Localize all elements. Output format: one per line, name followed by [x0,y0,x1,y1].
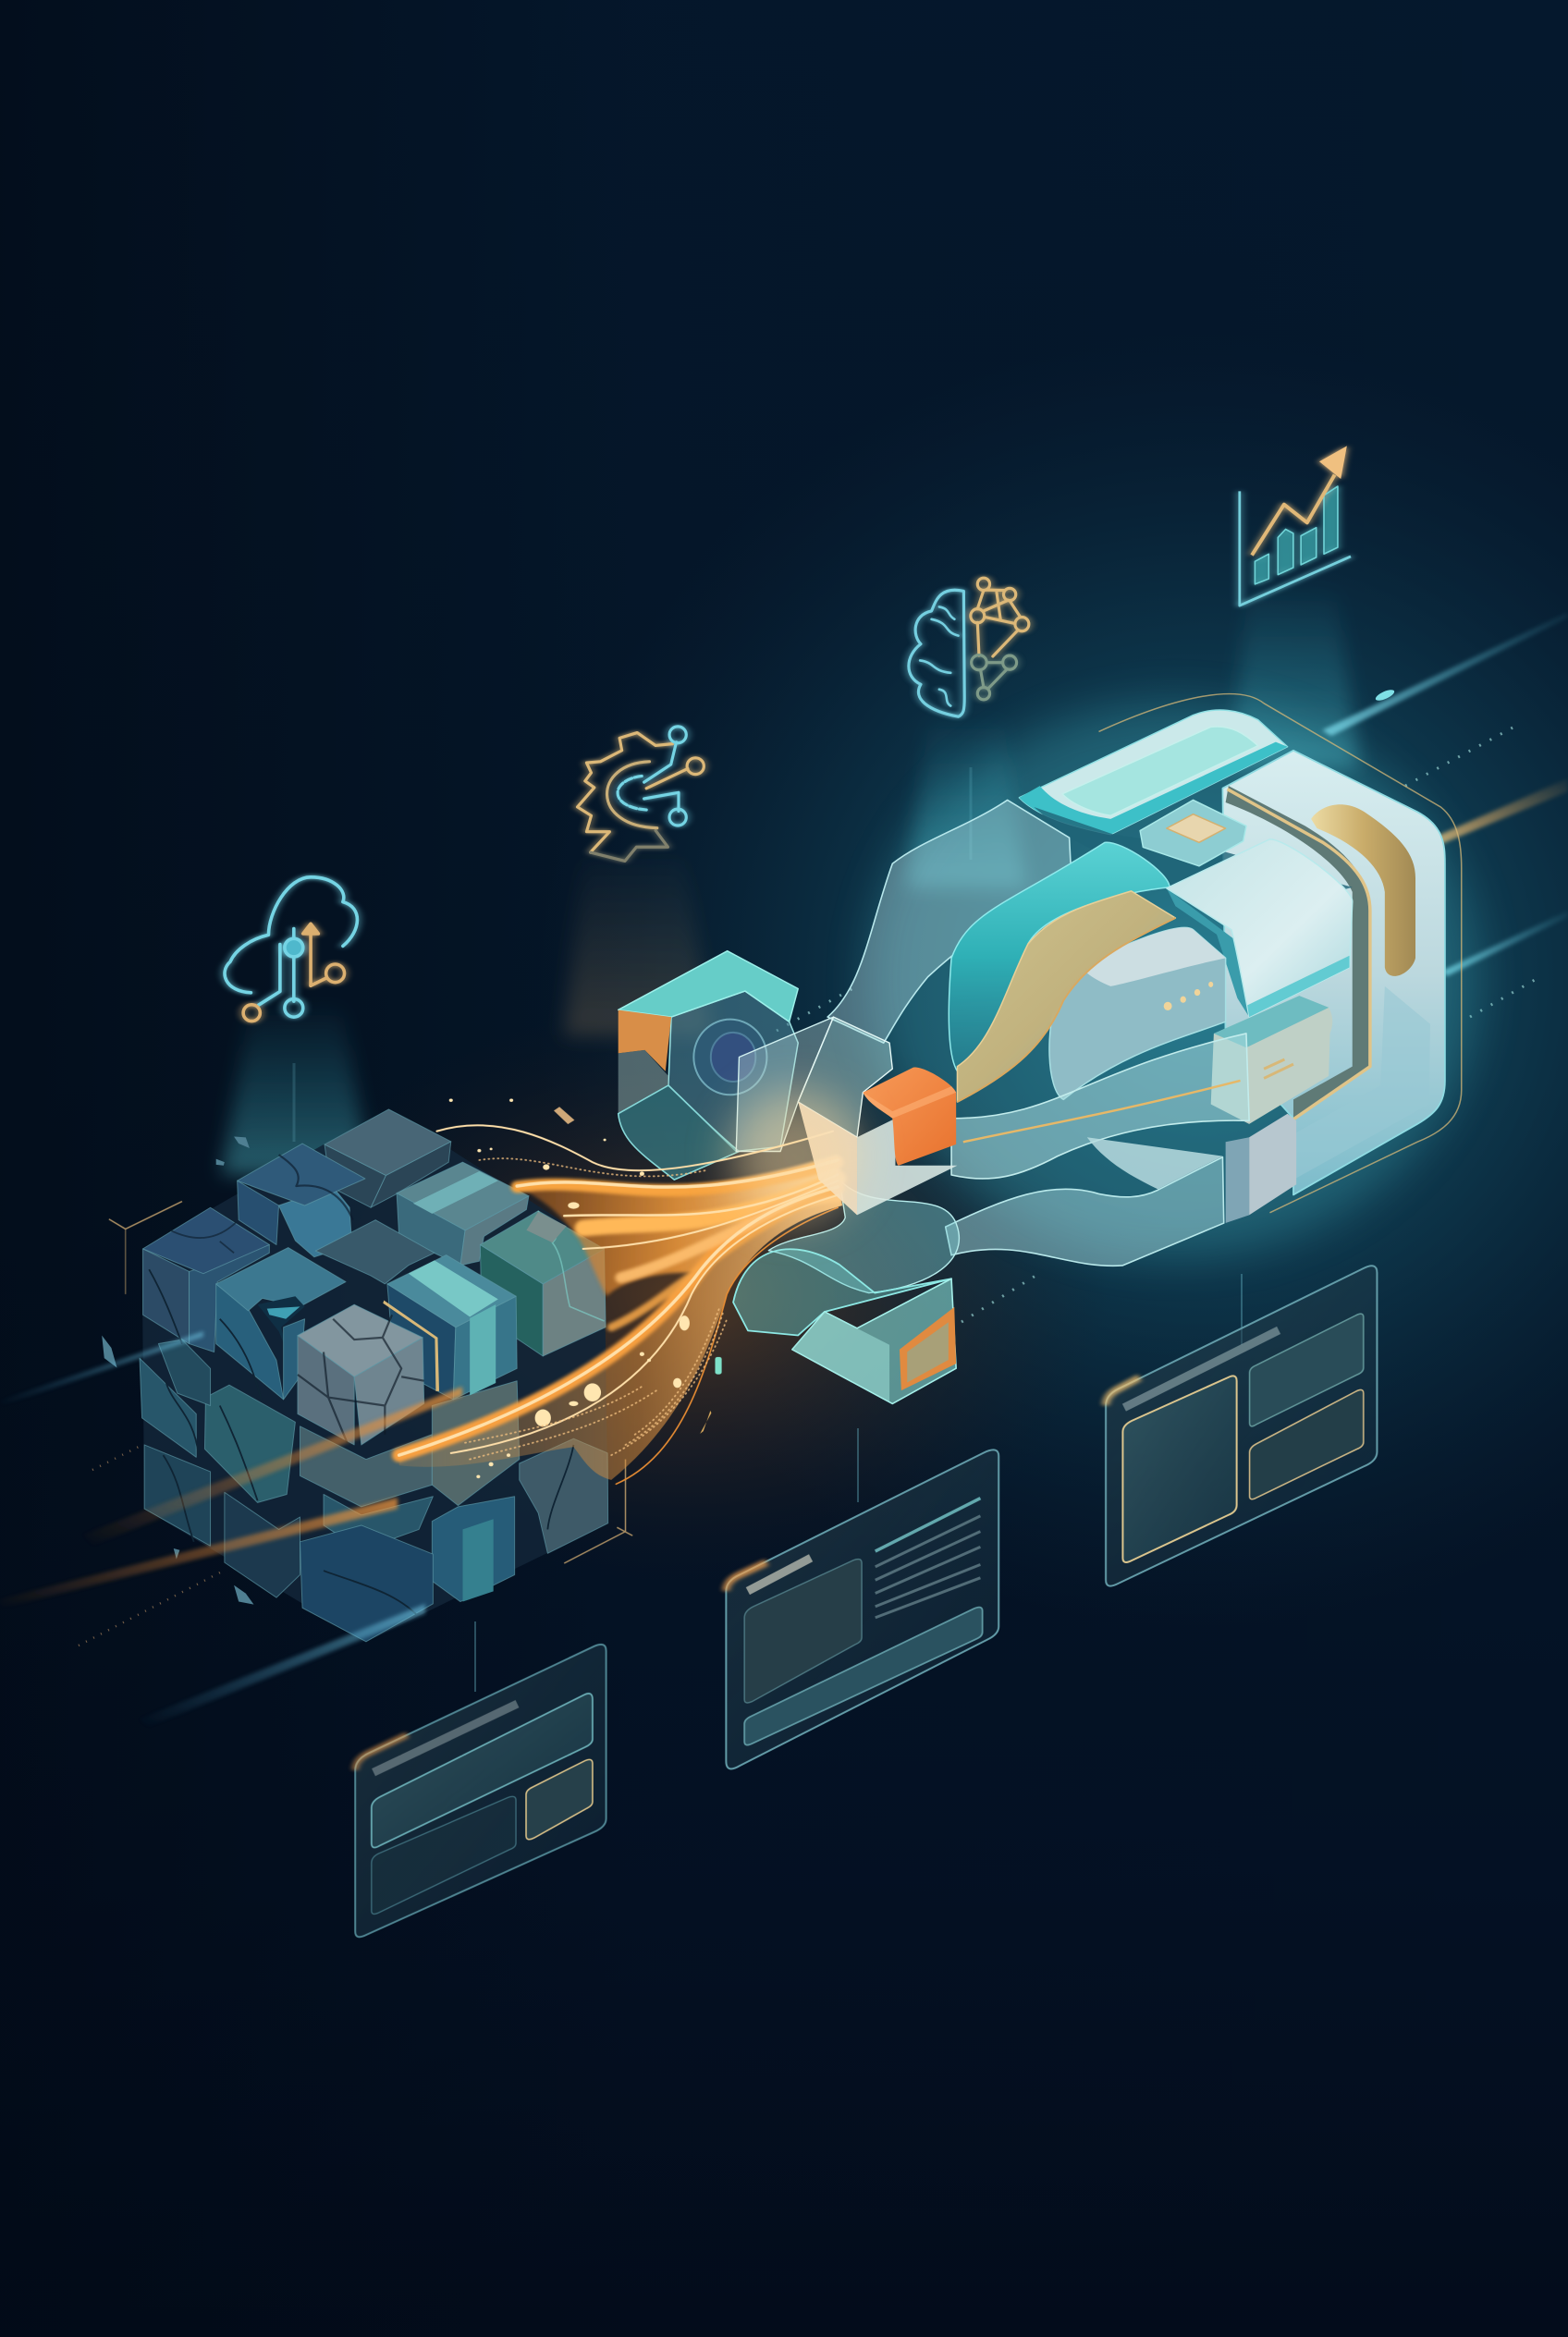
ghost ribbon rear [827,800,1072,1043]
bottom bracket [733,1249,956,1403]
icon: cloud circuit [225,877,357,1022]
gold ribbon [957,891,1175,1102]
lower ribbon [946,1157,1224,1266]
white block [1167,839,1353,1017]
light beams under icons [222,592,1359,1174]
connector lines [294,767,1242,1692]
cube: cracked blue [238,1144,365,1257]
central cube with orange cap [798,1017,957,1215]
panel: centre dashboard card [726,1450,998,1768]
cracks [149,1269,573,1616]
sparkle band [399,1187,842,1480]
cube mass shadow [142,1109,608,1642]
cube: dark blue left [143,1207,269,1352]
swirl below centre [768,1180,959,1293]
left bracket [619,951,798,1180]
broken data cubes [109,1109,632,1642]
lens streaks over cubes [0,1331,462,1727]
data stream [399,1098,842,1484]
cube: middle slab [315,1220,435,1284]
cyan ribbon [949,842,1170,1071]
orange cap [863,1068,956,1166]
small button [1140,800,1246,866]
beige module [1211,996,1332,1124]
cube: striped rear [397,1162,529,1266]
gold strap [1311,804,1415,976]
frame corners [109,1202,632,1563]
sparks [449,1098,690,1478]
streaks right of machine [777,612,1568,1322]
server block [1049,927,1226,1099]
shell inner channel [1226,786,1370,1120]
middle ribbon [951,1034,1249,1179]
central glow [730,1091,860,1220]
grey module [1226,1114,1296,1223]
loose shards [554,1107,574,1124]
cube: cracked grey front [298,1304,424,1445]
panel: right dashboard card [1106,1266,1377,1586]
shell [1222,751,1445,1194]
top cap [1019,710,1288,835]
dark gap [1034,807,1353,921]
machine: right module stack [619,694,1462,1403]
cube: lower back left [140,1340,300,1597]
icon: brain network [909,578,1029,716]
floating shards [102,1136,263,1605]
white tray [1087,1137,1222,1189]
main strokes [399,1162,838,1455]
machine: glow [869,703,1479,1257]
cube: middle teal cracked [216,1248,346,1400]
cube: top back [325,1109,451,1207]
connector sleeve [736,1017,833,1152]
icon: gear circuit [578,727,704,861]
cube: striped teal front [383,1255,517,1400]
panel: left dashboard card [355,1645,606,1937]
outer gold halo [1099,694,1462,1213]
warm fan [517,1155,842,1296]
icon: growth chart [1240,446,1351,606]
cube: grey teal right [480,1211,606,1356]
cube: lower centre [300,1381,608,1642]
